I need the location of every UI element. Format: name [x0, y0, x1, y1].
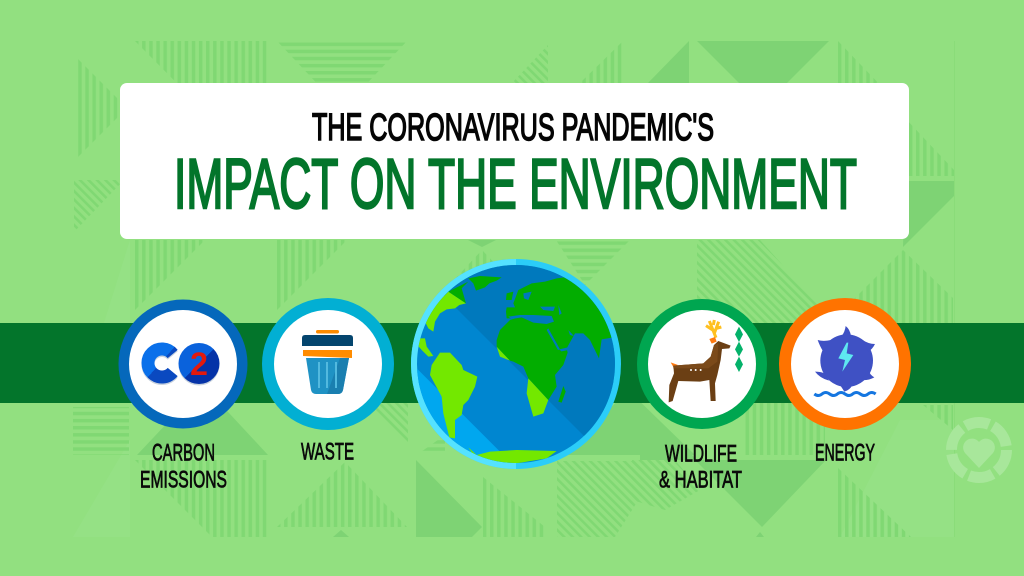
inland seas: [508, 292, 574, 351]
icon: waste bin badge: [262, 298, 394, 430]
icon: wildlife deer badge: [637, 299, 767, 429]
light land masses: [417, 292, 557, 463]
label: energy: ENERGY: [815, 440, 875, 467]
icon: globe: [411, 259, 621, 469]
label: carbon emissions: EMISSIONS: [140, 467, 227, 494]
label: waste: WASTE: [301, 439, 354, 466]
label: wildlife and habitat: WILDLIFE: [665, 441, 737, 468]
antlers: [706, 320, 721, 338]
title line 1: THE CORONAVIRUS PANDEMIC'S: [312, 107, 714, 149]
label: wildlife and habitat: & HABITAT: [659, 467, 742, 494]
leaves: [735, 327, 743, 342]
label: carbon emissions: CARBON: [152, 440, 215, 467]
background triangle pattern: [73, 41, 955, 537]
green band: [0, 323, 1024, 403]
deer body: [669, 341, 731, 402]
icon: carbon emissions badge: [118, 300, 248, 428]
label: carbon emissions: [140, 440, 227, 494]
dark land masses: [448, 276, 613, 403]
icon text: subscript 2: 2: [190, 346, 208, 382]
label: wildlife and habitat: [659, 441, 742, 494]
icon: energy turbine badge: [779, 298, 911, 430]
title panel: [120, 83, 909, 239]
watermark logo: [952, 422, 1006, 478]
